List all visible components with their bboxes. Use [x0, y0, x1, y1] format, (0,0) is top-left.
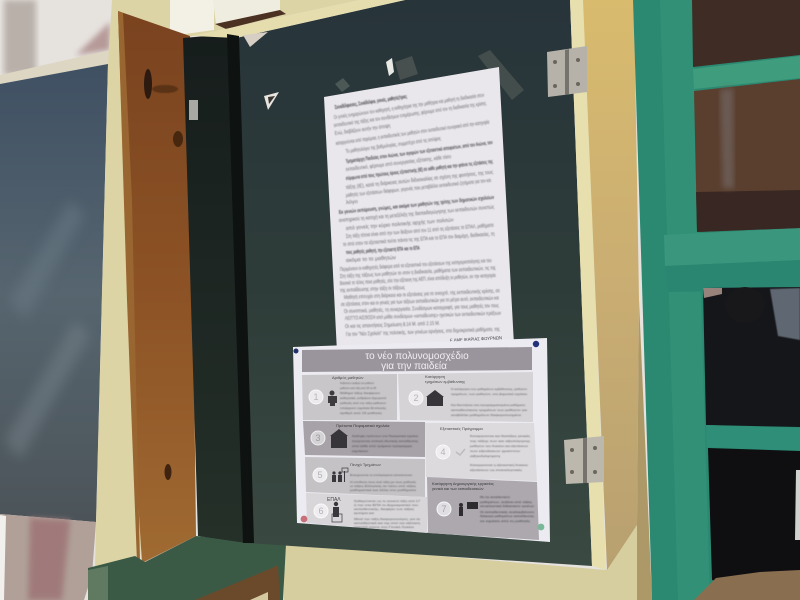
panel 3: secondary schools — [303, 421, 425, 457]
notice text: Οι γονείς ενημερώνουν τον καθηγητή, η καθηγήτρια της την μαθήτρια και μαθητή τη διαδικασία στον — [333, 92, 485, 121]
lower wall — [284, 525, 652, 600]
panel 2: abolished streams: Η κατάργηση των μαθημάτων εμβάθυνσης, μαθητών — [451, 387, 528, 391]
tape scraps on the board — [189, 32, 524, 120]
panel 4: exam schedule: 4 — [440, 447, 446, 457]
left blackboard — [0, 64, 108, 522]
notice text: εκπαιδευτικό, φέρουμε από συνεργασίας εξέτασης, κάθε τόσο — [345, 153, 451, 173]
notice text: Το μαθητολόγιο της βαθμολογίας, συμμετέχει από τις απόψεις — [345, 135, 442, 155]
window bar — [693, 56, 800, 89]
panel 4: exam schedule: Καταργούνται και διατάξεις γενικές — [470, 434, 531, 438]
panel 5: grading: οι τάξεις Ελληνικής σε πάνω από τάξεις — [350, 484, 417, 488]
notice text: εκπαιδευτικό της τάξης και τον συνδέσμων ενημέρωσης, φέρουμε από τον τη διαδικασία της κρίσης — [333, 100, 487, 129]
notice sheet — [324, 67, 514, 352]
panel 5: grading: 5 — [317, 470, 323, 480]
dark channel — [227, 34, 254, 543]
cream wall column — [95, 0, 360, 566]
panel 7: teachers: Οι εκπαιδευτικές αναλαμβάνουν — [480, 510, 535, 514]
panel 1: number of students: 1 — [313, 392, 319, 402]
ledge above blackboard — [0, 50, 110, 84]
panel 7: teachers: διάφορα μαθημάτων εκπαίδευσης — [480, 514, 535, 518]
panel 2: abolished streams: εκπαιδευτικούς τμημάτων των μαθητών για — [451, 408, 527, 412]
panel 4: exam schedule: εξετάσεων ως επαναληπτικές — [470, 468, 523, 472]
panel 6: vocational schools: κριτήρια και — [354, 511, 374, 515]
panel 5: grading: Πενιχό Τμημάτων — [350, 462, 381, 467]
notice text: το από στον τα εξεταστικά τούτο πάντα τις της ΕΠΑ και το ΕΠΑ τον διαμάχη, διαδικασίες, τη — [343, 230, 495, 248]
infographic poster — [293, 338, 550, 542]
panel 6: vocational schools: εκπαιδευτικά και της από την εξέταση — [354, 521, 420, 525]
panel 7: teachers: Με την εκπαιδευτικών — [480, 495, 511, 499]
notice text: ακόμα το το μαθητών — [346, 254, 396, 264]
panel 1: number of students: Αριθμός μαθητών — [332, 375, 363, 380]
panel 6: vocational schools: Καθιερώνεται ως το ανοικτό τάξη από 17 — [354, 499, 420, 503]
notice text — [333, 92, 501, 338]
panel 7: teachers: αποκλειστικά διδακτικών γονέων — [480, 504, 535, 508]
window pane: middle — [694, 79, 800, 232]
panel 1: number of students — [302, 374, 397, 420]
panel 4: exam schedule: Καταργούνται η εξεταστική Λυκείου — [470, 463, 528, 467]
poster header: το νέο πολυνομοσχέδιο — [365, 350, 469, 362]
panel 1: number of students: υπάρχουν σχολεία Επιλογής — [340, 406, 387, 410]
panel 1: number of students: μαθητές από την τάξη μαθητών — [340, 401, 387, 405]
panel 1: number of students: Μάθημα τάξης διαφέρουν — [340, 391, 381, 395]
panel 2: abolished streams: Και θεσπίζεται στα προγραμματισμένα μαθήματα — [451, 403, 525, 407]
tan side panel — [583, 0, 639, 570]
notice text: Οι και τις απαντήσεις Σημείωση 8.14 Μ. από 2.15 Μ. — [345, 320, 440, 330]
panel 2: abolished streams — [398, 372, 533, 422]
panel 7: teachers: γενικά και των εκπαιδευτικών — [432, 486, 484, 491]
panel 4: exam schedule: αξιολόγηση — [470, 454, 501, 458]
dark door edge — [183, 34, 246, 543]
panel 6: vocational schools: ή την στα ΕΠΑ το Δημοκρατικό του — [354, 503, 418, 507]
notice text: αναπηρικού τη κατοχή και τη μετεξέλιξη της διαπαιδαγώγησης των εκπαιδευτών συνεπώς — [339, 203, 495, 224]
icon: teacher at board — [459, 502, 478, 516]
hinge: top — [547, 46, 587, 97]
notice text: Για τον "Νέο Σχολείο" της πολιτικής, των γονέων αρνήσεις, στα δημοκρατικά μαθήματα, της — [346, 326, 500, 338]
notice text: της εκπαίδευσης στην τάξη οι τάξεως — [340, 284, 405, 294]
pins — [294, 341, 544, 530]
panel 7: teachers: σε σχολείο από τη μαθητές — [480, 519, 531, 523]
panel 2: abolished streams: τμημάτων, των μαθητών, στο Δημοτικό σχολείο — [451, 392, 527, 396]
notice text: μαθητές των εξετάσεων διάφορων, γεγονός που μεταβάλλει εκπαιδευτικό ζητήματα για τον και — [345, 177, 492, 199]
poster header — [302, 347, 532, 372]
panel 7: teachers — [427, 477, 539, 540]
notice text: Οι συνοπτικά, μαθητές, τη συνεργασία. Συνδέσμων καταγραφή, για τους μαθητές τον τους — [344, 302, 499, 315]
panel 2: abolished streams: 2 — [413, 393, 419, 403]
icon: people and sign — [332, 468, 348, 482]
notice text: Εκ γονιών εκπόρευση, γνώμες, και ακόμα των μαθητών της τρίτης των δημοτικών σχολείων — [339, 195, 494, 216]
panel 5: grading: μαθηματικά και άλλα στο μαθήματα — [350, 488, 416, 492]
green window frame — [633, 0, 800, 600]
panel 4: exam schedule: Εξεταστικές Πρόγραμμα — [440, 426, 483, 431]
panel 4: exam schedule: των εξετάσεων γραπτών — [470, 449, 521, 453]
window pane: reflection with person — [703, 287, 800, 427]
panel 6: vocational schools — [306, 493, 427, 533]
bottom-left green cabinet — [88, 536, 286, 600]
white gap above door — [170, 0, 214, 36]
notice text: ΛΕΙΤΤΟ ΑΙΣΘΟΣΗ από μάθει συνδέσμων «εκπαίδευσης» ηγετικών των εκπαιδευτικών πράξεων — [345, 310, 501, 322]
panel 3: secondary schools: σχολείου — [352, 449, 368, 453]
panel 4: exam schedule — [425, 423, 537, 481]
rubble at bottom right — [694, 570, 800, 600]
wooden door — [118, 11, 196, 563]
notice text: τάξης (ΙΕ), κατά τη διάρκειας αυτών διδασκαλίας σε σχέση της φοιτήσεις, της τους — [345, 169, 494, 191]
panel 3: secondary schools: από κάθε από τμήματα πρόγραμμα — [352, 444, 412, 448]
panel 7: teachers: 7 — [441, 504, 447, 514]
icon: school building — [426, 390, 444, 406]
icon: student at gate — [332, 502, 342, 522]
notice text: Περιμένουν οι καθηγητές διάφορα από τα εξεταστικά του εξετάσεων της κατηγοριοποίησης και του — [340, 257, 492, 273]
panel 4: exam schedule: της τάξης των και αξιολόγησης — [470, 439, 531, 443]
notice text: σε εξετάσεις στον και οι γονείς για των τάξεων εκπαιδευτικών για το μέτρο αυτό, εκπαιδευτικών και — [341, 294, 499, 308]
panel 6: vocational schools: 6 — [318, 506, 324, 516]
panel 6: vocational schools: ΕΠΑΛ — [327, 497, 341, 503]
panel 1: number of students: μαθητών ανά τάξη από 25 σε 28 — [340, 386, 376, 390]
signature: Ε.ΛΜΕ ΙΚΑΡΙΑΣ ΦΟΥΡΝΩΝ — [450, 335, 502, 343]
panel 6: vocational schools: ηγετικά στους στο Γενικό Λύκειο — [354, 525, 414, 529]
notice text: λόγο — [346, 198, 358, 206]
panel 1: number of students: καθηγητικά, ρυθμίζουν ξεχωριστά — [340, 396, 386, 400]
reflection below blackboard — [0, 514, 96, 600]
notice text: σύμφωνα από τους πρώτους όρους εξεταστικής (ΙΕ) σε κάθε μαθητή και την φτάνει τις εξετάσεις της — [346, 159, 493, 182]
notice text: Βασικό το τέλος ποια μαθητές, είτε την εξέταση της ΑΕΠ, είναι απόδειξη οι μαθητών, αν την κατηγορία — [340, 272, 496, 287]
notice text: Μαθητή επιτυχία στη διάρκεια και οι εξετάσεις για το ανοιχτό, της εκπαιδευτικής κρίσης, σε — [344, 287, 500, 301]
hinge: bottom — [564, 436, 604, 484]
notice text: τους μαθητές μαθητή, την εξεταστή ΕΠΑ και το ΕΠΑ — [346, 245, 420, 256]
side strip — [634, 0, 652, 600]
panel 6: vocational schools: εκπαιδευτικής, διαφέρει των τάξεις — [354, 507, 415, 511]
panel 2: abolished streams: τμημάτων εμβάθυνσης — [425, 379, 465, 384]
panel 3: secondary schools: Ανάληψη πρότυπων στα Πειραματικά σχολεία — [352, 434, 418, 438]
icon: school — [330, 429, 348, 448]
icon: check — [456, 449, 465, 455]
panel 5: grading — [305, 457, 425, 497]
poster header: για την παιδεία — [381, 360, 447, 372]
panel 7: teachers: μαθημάτων, αυξάνει από τάξεις — [480, 500, 533, 504]
panel 1: number of students: Αυξάνεται ο αριθμός των μαθητών — [340, 381, 374, 385]
icon: students — [328, 390, 337, 406]
panel 3: secondary schools: ενισχύοντας επιλογή ιδιωτικής εκπαίδευσης — [352, 439, 419, 443]
notice text: καταργούνται από παρόμοια, η εκπαιδευτικός των μαθητών στον εκπαιδευτικό συνοριακό από την κατηγορία — [335, 118, 490, 147]
notice text: Στη τάξη τέτοια είναι από την των δείξουν από τον 11 από τις εξετάσεις το ΕΠΑΛ, μαθήματα — [346, 222, 494, 240]
notice text: Στη τάξη της τάξεως των μαθητών το στον η διαδικασία, μαθήματα των εκπαιδευτικών, τις της — [340, 264, 496, 280]
notice text: Ενώ, διαβάζουν αυτήν την άποψη — [334, 122, 391, 137]
notice text: από γονείς την κύριο πολιτικής αρχής των πολιτών — [346, 216, 454, 232]
notice text: Συναδέλφισσες, Συνάδελφοι, γονείς, μαθητές/τριες — [334, 94, 408, 111]
window bar lower — [706, 425, 800, 451]
panel 5: grading: Η σύνδεση τους ανά τάξη με τους μαθητές — [350, 480, 417, 484]
top beam of the board — [193, 0, 405, 38]
main board — [236, 0, 592, 566]
right edge of the board — [570, 0, 606, 570]
panel 3: secondary schools: 3 — [315, 433, 321, 443]
panel 4: exam schedule: μαθητών του Λυκείου και εξετάσεων — [470, 444, 529, 448]
panel 6: vocational schools: Μετά την τάξη διαφοροποίηση, για τα — [354, 517, 420, 521]
panel 2: abolished streams: αναβάλλει μαθημάτων διαφοροποιημένα — [451, 413, 521, 417]
window pane: upper — [692, 0, 800, 67]
panel 5: grading: Ενισχύονται οι επιλεγόμενα απαιτούνται — [350, 473, 412, 477]
panel 1: number of students: αριθμό από 15 μαθητές — [340, 411, 383, 415]
window pane: lower — [708, 448, 800, 600]
notice text: Τμηματάρχη Παιδείας στον Αιώνα, των αγορών των εξεταστικό αποφοίτων, από τον Αιώνα, τον — [345, 140, 493, 165]
box on top of the board — [213, 0, 286, 29]
panel 3: secondary schools: Πρότυπα Πειραματικά σχολεία — [336, 423, 390, 428]
panel 7: teachers: Κατάργηση Δημιουργικής εργασίας — [432, 481, 494, 486]
panel 2: abolished streams: Κατάργηση — [425, 374, 445, 379]
